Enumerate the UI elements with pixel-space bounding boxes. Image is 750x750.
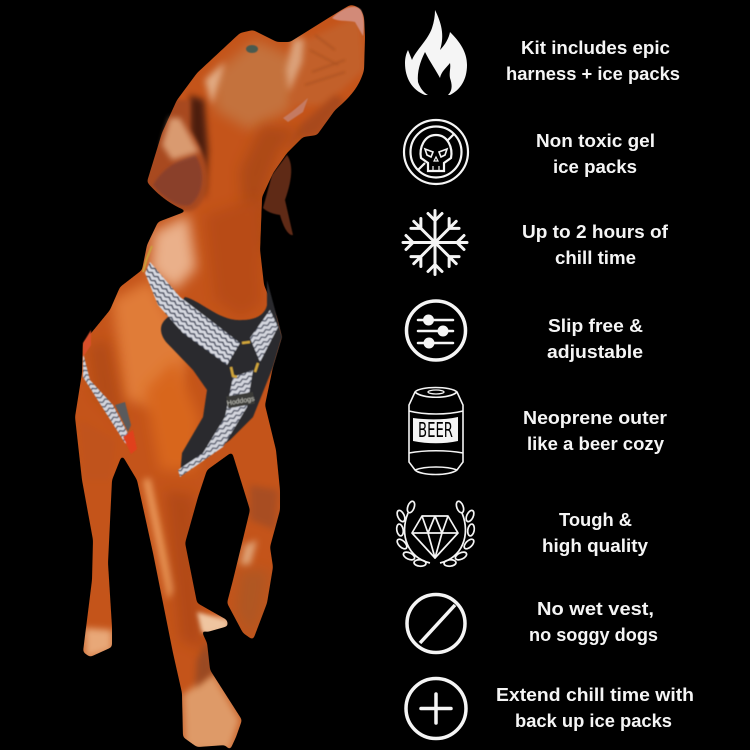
dog photo illustration [75,5,365,748]
skull [421,135,451,171]
harness buckle [143,246,152,272]
text: tough [542,510,648,556]
harness ring [231,342,258,377]
text: slip free: Slip free & [548,316,643,336]
harness [83,246,282,477]
harness red tab upper [83,330,91,357]
text: harness kit: Kit includes epic [521,38,670,58]
icon: snowflake [403,210,467,274]
text: non toxic: ice packs [553,157,637,177]
dog eye [246,45,258,53]
icon: skull in circle [404,120,468,184]
text: chill time [522,222,669,268]
dog shading [80,15,364,750]
text: extend chill time: Extend chill time with [496,685,694,705]
icon: diamond with laurels [395,500,476,567]
text: non toxic [536,131,655,177]
harness padded body [161,280,282,477]
icon: plus in circle [406,678,466,738]
muzzle wrinkles [305,35,345,85]
harness side strap [83,353,135,447]
icon: beer can [409,388,463,474]
harness side pad [115,402,131,432]
text: chill time: Up to 2 hours of [522,222,669,242]
harness label: Hoddogs [226,396,256,407]
icon: flame [405,10,467,95]
harness chest strap [145,262,240,365]
text: tough: high quality [542,536,648,556]
icon: sliders in circle [406,301,466,360]
text: no wet vest: No wet vest, [537,599,654,619]
text: slip free [547,316,643,362]
text: neoprene [523,408,667,454]
text: extend chill time [496,685,694,731]
text: harness kit: harness + ice packs [506,64,680,84]
text: no wet vest [529,599,658,645]
text: no wet vest: no soggy dogs [529,625,658,645]
dog ear highlight [162,118,199,160]
beer label: BEER [418,418,453,442]
harness shoulder strap [250,310,278,362]
dog back ear [263,155,293,235]
dog lip fold [283,98,308,122]
text: neoprene: like a beer cozy [527,434,664,454]
dog nose [332,7,364,36]
harness red tab [123,430,137,454]
text: non toxic: Non toxic gel [536,131,655,151]
dog ear [147,100,207,211]
text: neoprene: Neoprene outer [523,408,667,428]
harness label [226,392,256,408]
text: harness kit [506,38,680,84]
text: extend chill time: back up ice packs [515,711,672,731]
text: tough: Tough & [559,510,632,530]
text: slip free: adjustable [547,342,643,362]
dog body [75,5,365,748]
text: chill time: chill time [555,248,636,268]
harness centre strap [178,370,253,477]
icon: prohibited circle [407,594,465,652]
dog ear inner [153,155,202,206]
